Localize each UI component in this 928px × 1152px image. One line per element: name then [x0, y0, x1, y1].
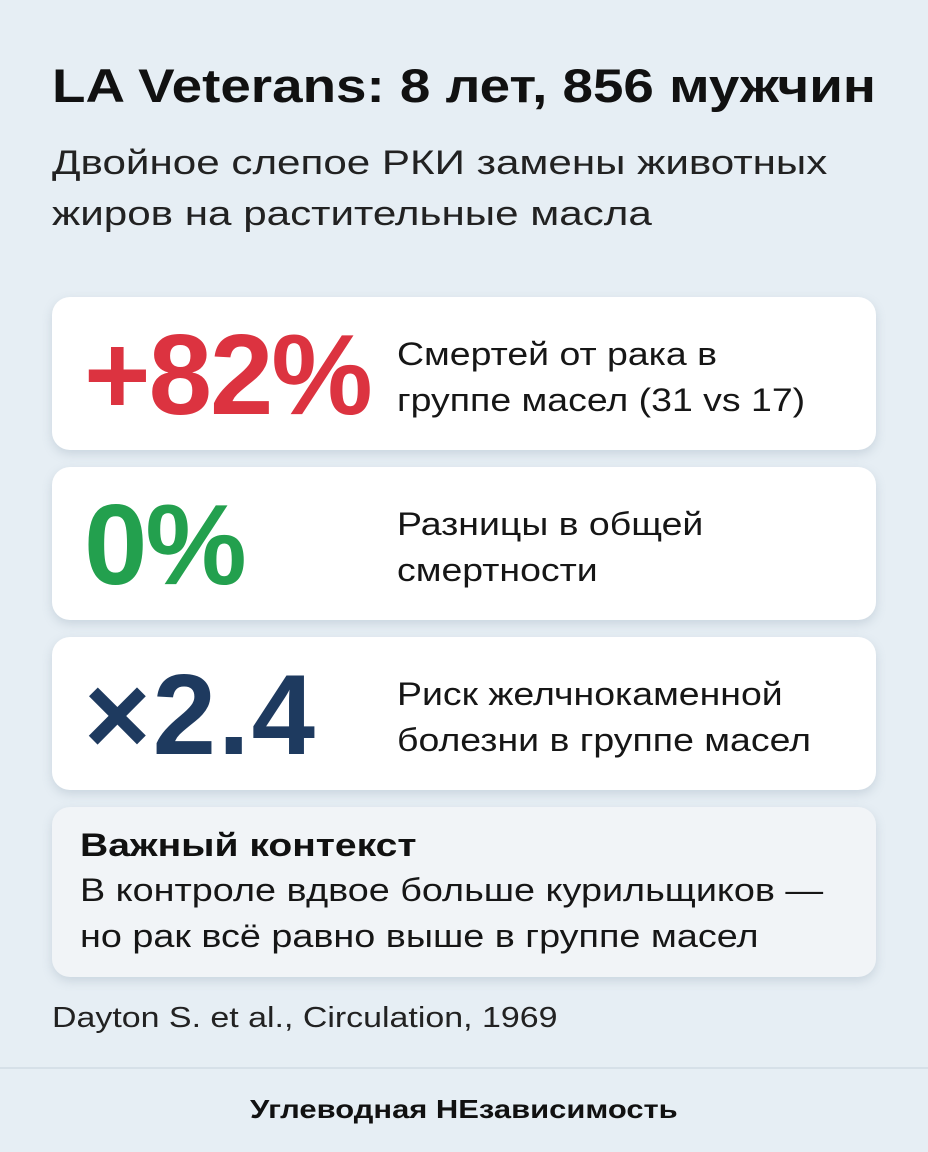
context heading: Важный контекст: [80, 827, 416, 863]
card: gallstones: [52, 637, 876, 790]
card: cancer deaths: [52, 297, 876, 450]
stat: x2.4: ×2.4: [84, 652, 317, 779]
text: gallstones: [397, 676, 811, 758]
text: cancer deaths: [397, 336, 805, 418]
text: total mortality: [397, 506, 703, 588]
citation: Dayton S. et al., Circulation, 1969: [52, 1002, 557, 1034]
text: gallstones: болезни в группе масел: [397, 722, 811, 758]
context text: [80, 872, 824, 954]
title: LA Veterans: 8 лет, 856 мужчин: [52, 59, 876, 112]
card: total mortality: [52, 467, 876, 620]
text: cancer deaths: Смертей от рака в: [397, 336, 717, 372]
stat: +82%: +82%: [84, 312, 371, 439]
subtitle: [52, 144, 827, 233]
subtitle: Двойное слепое РКИ замены животных: [52, 144, 827, 182]
text: cancer deaths: группе масел (31 vs 17): [397, 382, 805, 418]
card: important context: [52, 807, 876, 977]
text: gallstones: Риск желчнокаменной: [397, 676, 783, 712]
subtitle: жиров на растительные масла: [52, 195, 652, 233]
footer brand: Углеводная НЕзависимость: [250, 1094, 678, 1124]
text: total mortality: Разницы в общей: [397, 506, 703, 542]
text: total mortality: смертности: [397, 552, 598, 588]
context text: но рак всё равно выше в группе масел: [80, 918, 759, 954]
stat: 0%: 0%: [84, 482, 245, 609]
context text: В контроле вдвое больше курильщиков —: [80, 872, 823, 908]
